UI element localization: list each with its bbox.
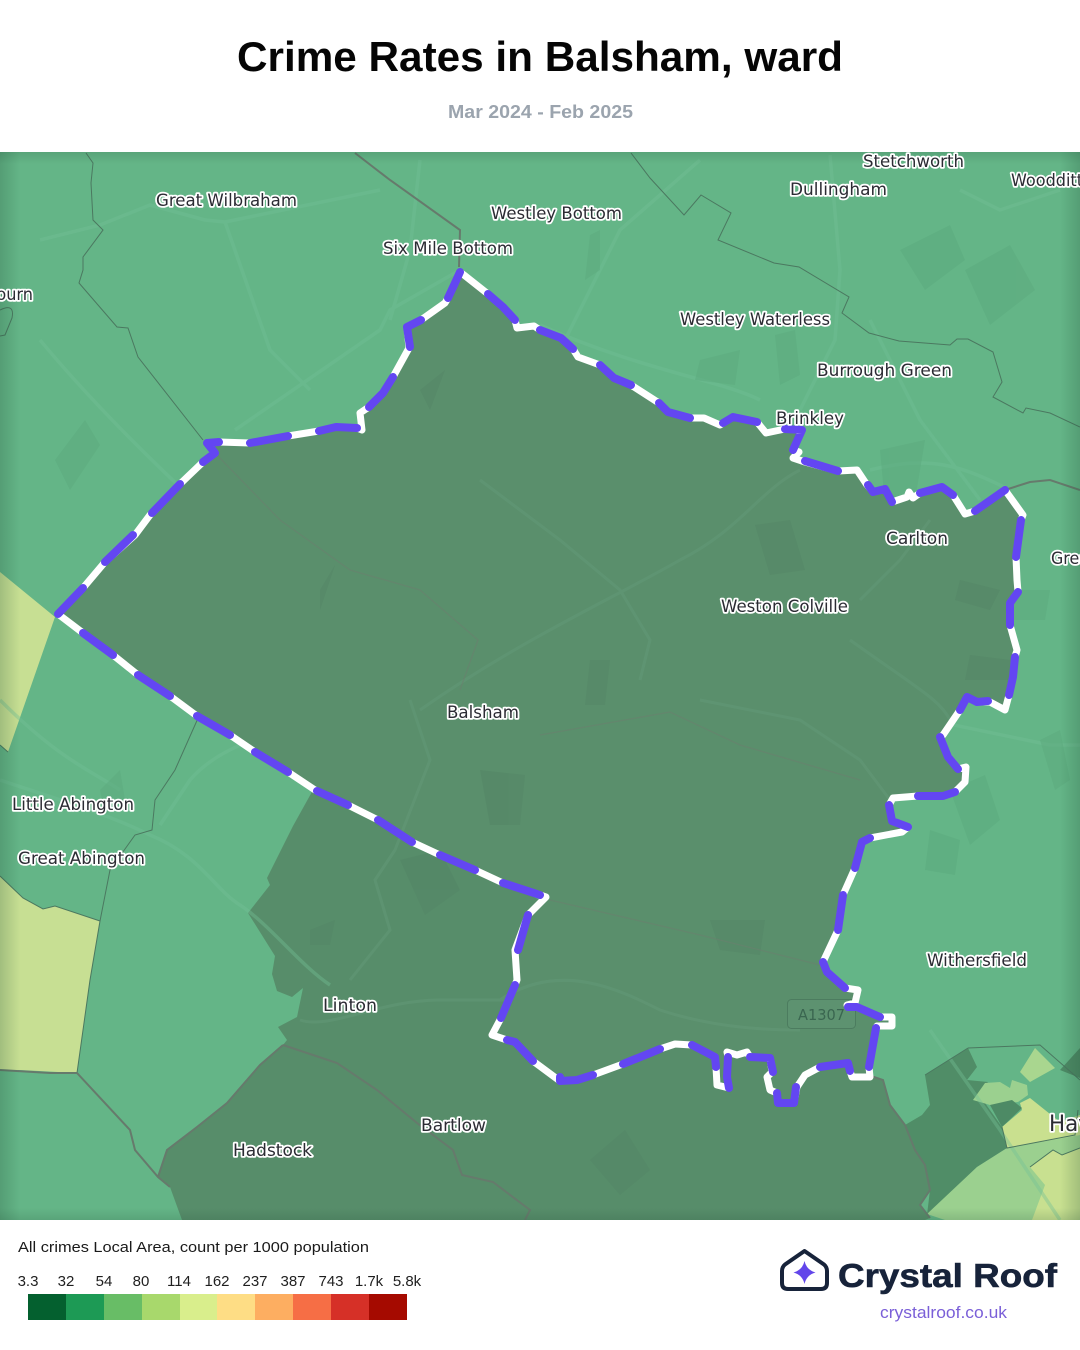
map edge vignette — [0, 152, 1080, 1220]
area: yellow south-east corner — [1030, 1148, 1080, 1220]
area: yellow-green west lower — [0, 876, 100, 1073]
header — [237, 33, 843, 122]
ward area: Balsham — [58, 272, 1023, 1103]
place: Withersfield: Withersfield — [927, 951, 1027, 971]
area: dark patch Haverhill — [1060, 1048, 1080, 1078]
place: Great Wilbraham: Great Wilbraham — [156, 191, 297, 211]
place: Hadstock: Hadstock — [233, 1141, 312, 1161]
logo: Crystal Roof — [782, 1251, 1058, 1322]
place: Linton: Linton — [323, 996, 377, 1016]
legend scale labels: 80 — [133, 1273, 149, 1290]
fields and roads inside ward — [300, 370, 1010, 1195]
road label: A1307 — [788, 1000, 856, 1028]
place: Six Mile Bottom: Six Mile Bottom — [383, 239, 513, 259]
place: Dullingham: Dullingham — [790, 180, 887, 200]
legend colour bar — [28, 1294, 407, 1320]
ward boundary: purple dashes — [58, 272, 1021, 1103]
legend scale labels: 1.7k — [355, 1273, 384, 1290]
legend scale labels: 5.8k — [393, 1273, 422, 1290]
title: Crime Rates in Balsham, ward — [237, 33, 843, 80]
place: Burrough Green: Burrough Green — [817, 361, 952, 381]
legend title: All crimes Local Area, count per 1000 population — [18, 1239, 369, 1256]
legend scale labels: 54 — [96, 1273, 112, 1290]
place: Westley Bottom: Westley Bottom — [491, 204, 622, 224]
map background — [0, 152, 1080, 1220]
area: yellow Haverhill — [1002, 1098, 1080, 1148]
legend scale labels: 3.3 — [18, 1273, 38, 1290]
footer — [18, 1239, 1058, 1322]
area: light green Haverhill north — [973, 1080, 1028, 1105]
roads outside — [0, 155, 1080, 1220]
legend scale labels — [18, 1273, 422, 1290]
place: Great Abington: Great Abington — [18, 849, 145, 869]
area: south-east dark green — [905, 1048, 1007, 1215]
place: Carlton: Carlton — [886, 529, 948, 549]
map — [0, 152, 1080, 1220]
place: Westley Waterless: Westley Waterless — [680, 310, 830, 330]
legend scale labels: 114 — [167, 1273, 191, 1290]
faint boundaries inside ward — [215, 453, 860, 965]
area: south dark green — [158, 790, 930, 1220]
parish boundaries — [0, 153, 1080, 1167]
place: Stetchworth: Stetchworth — [863, 152, 964, 172]
legend scale labels: 32 — [58, 1273, 74, 1290]
area: yellow-green west upper — [0, 572, 55, 752]
place: Bartlow: Bartlow — [421, 1116, 486, 1136]
ward boundary: white line — [58, 272, 1023, 1103]
district boundaries — [0, 153, 1080, 1220]
area: light green south-east — [927, 1125, 1080, 1220]
place: Brinkley: Brinkley — [776, 409, 844, 429]
subtitle: date range: Mar 2024 - Feb 2025 — [448, 102, 633, 122]
wordmark: Crystal Roof — [838, 1257, 1058, 1294]
website url: crystalroof.co.uk — [880, 1304, 1008, 1322]
legend scale labels: 743 — [318, 1273, 344, 1290]
icon: house with star — [782, 1251, 827, 1289]
legend scale labels: 162 — [204, 1273, 230, 1290]
road label: A1307: A1307 — [798, 1006, 845, 1024]
place: Weston Colville: Weston Colville — [721, 597, 848, 617]
area: pale green Haverhill top — [1020, 1048, 1055, 1082]
place: Balsham: Balsham — [447, 703, 519, 723]
place: Little Abington: Little Abington — [12, 795, 134, 815]
legend scale labels: 237 — [242, 1273, 268, 1290]
legend — [18, 1239, 422, 1320]
fields outside — [55, 225, 1070, 875]
place name labels — [0, 152, 1080, 1161]
area: dark patch Haverhill centre — [990, 1100, 1022, 1127]
legend scale labels: 387 — [280, 1273, 306, 1290]
